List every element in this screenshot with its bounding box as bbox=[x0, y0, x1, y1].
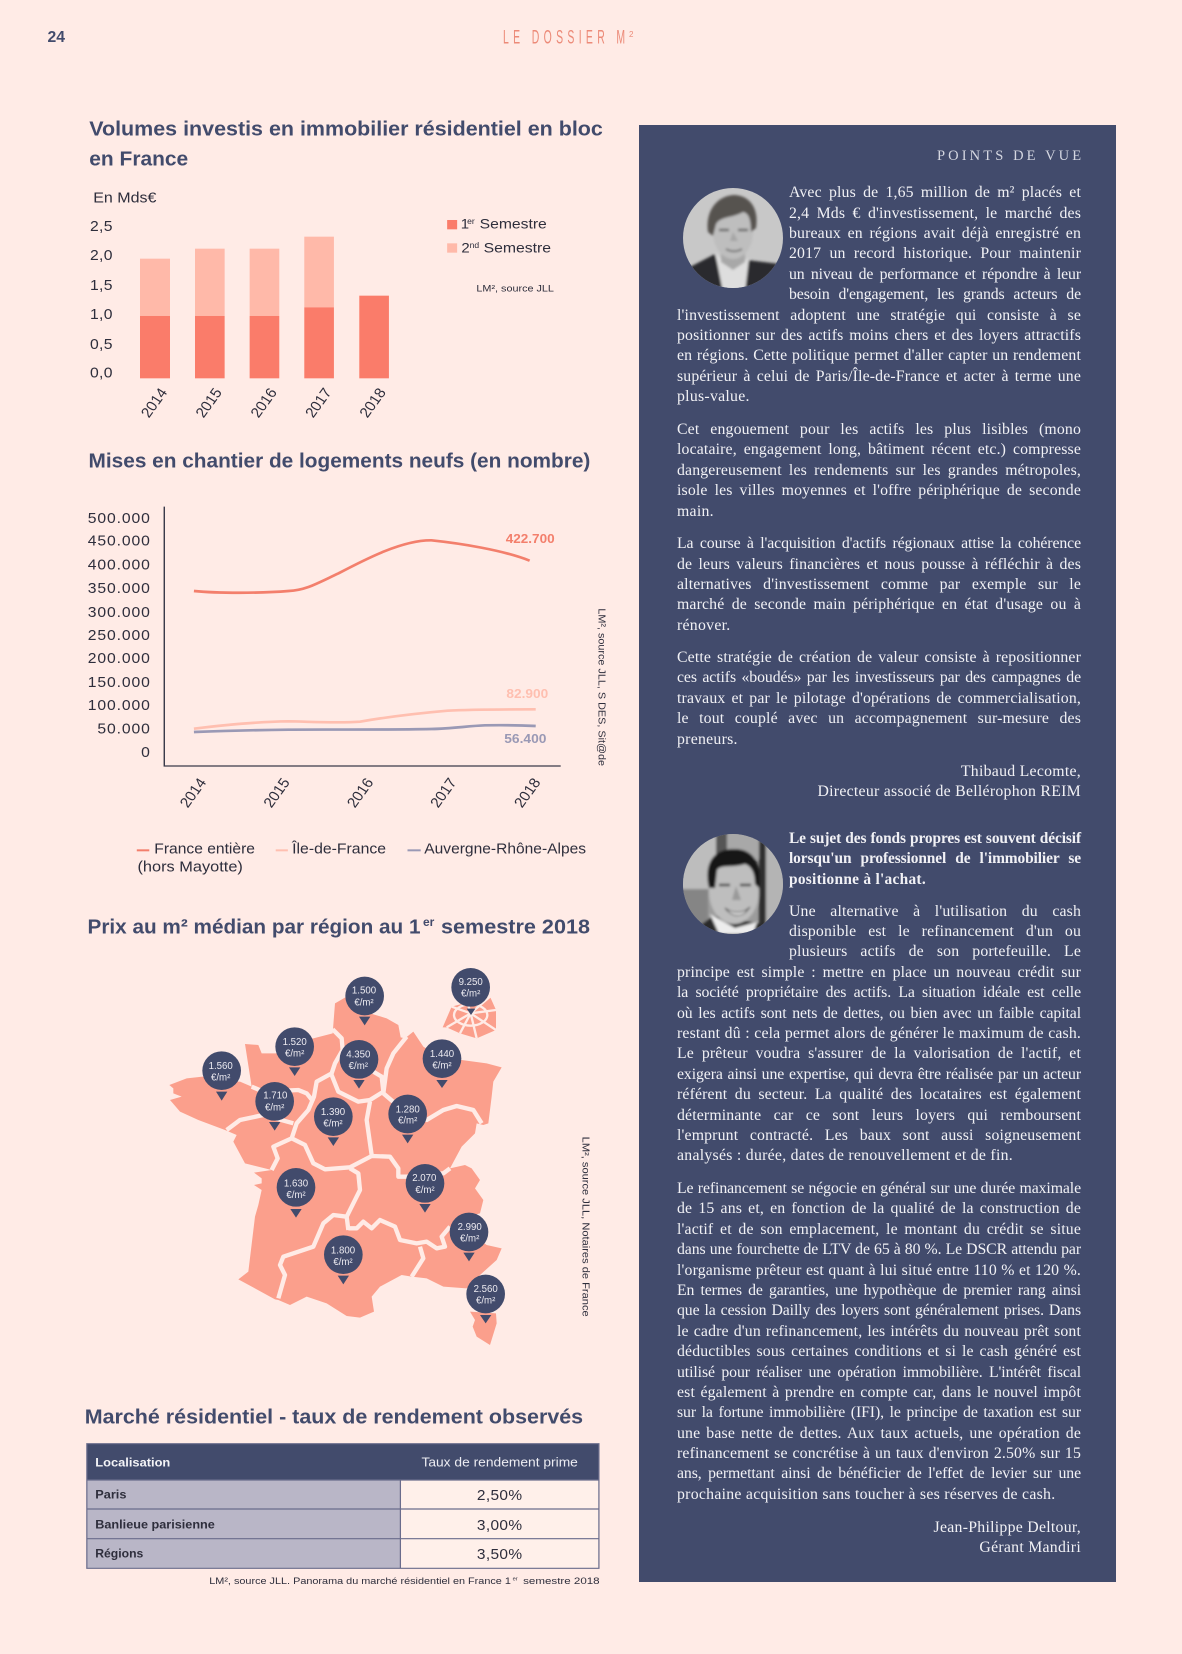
France silhouette bbox=[169, 993, 502, 1318]
x axis years bbox=[139, 386, 390, 421]
pin: Normandie bbox=[275, 1027, 314, 1076]
pin: Île-de-France: 4.350 bbox=[346, 1050, 370, 1061]
paragraph: conditions de crédit: est également à prendre en compte car, dans le nouvel impôt bbox=[677, 1384, 1081, 1401]
source note: LM², source JLL. Panorama du marché résidentiel en France 1 bbox=[209, 1576, 511, 1586]
source note: LM², source JLL, S DES, Sit@de bbox=[595, 608, 607, 766]
y axis labels: 500.000 bbox=[88, 510, 151, 527]
pin: Auvergne-Rhône-Alpes bbox=[406, 1164, 444, 1213]
legend: er bbox=[467, 216, 475, 226]
pin: Corse: 2.560 bbox=[474, 1284, 498, 1295]
pin: Corse bbox=[466, 1275, 505, 1323]
y axis labels: 0,5 bbox=[90, 336, 113, 353]
line: Île-de-France bbox=[194, 709, 536, 729]
table row: Régions: Régions bbox=[95, 1547, 143, 1561]
running header: LE DOSSIER M bbox=[503, 27, 625, 48]
paragraph: conditions de crédit: de 15 ans et, en fonction de la qualité de la construction de bbox=[677, 1200, 1081, 1217]
legend bbox=[137, 841, 586, 876]
y axis labels: 150.000 bbox=[88, 674, 151, 691]
legend: Île-de-France bbox=[291, 841, 386, 858]
paragraph: refinancement du portefeuille: plusieurs actifs de son portefeuille. Le bbox=[789, 943, 1081, 960]
value labels: 82.900 bbox=[506, 686, 548, 701]
signature: Thibaud Lecomte: Thibaud Lecomte, bbox=[961, 763, 1081, 780]
paragraph: opening with portrait: Avec plus de 1,65 million de m² placés et bbox=[789, 184, 1081, 201]
x axis years: 2014 bbox=[177, 776, 210, 811]
paragraph: stratégie bbox=[677, 649, 1081, 748]
x axis years: 2018 bbox=[357, 386, 390, 421]
pin: Paris bbox=[451, 968, 490, 1015]
paragraph: refinancement du portefeuille: exigera ainsi une expertise, qui devra être réalisée par un acteur bbox=[677, 1066, 1081, 1083]
paragraph: refinancement du portefeuille: disponible est le refinancement d'un ou bbox=[789, 923, 1081, 940]
pin: Hauts-de-France: €/m² bbox=[354, 997, 374, 1008]
pin: Corse: €/m² bbox=[476, 1295, 496, 1306]
paragraph: conditions de crédit: refinancement se concrétise à un taux d'environ 2.50% sur 15 bbox=[677, 1445, 1081, 1462]
paragraph: refinancement du portefeuille: restant dû : cela permet alors de générer le maximum de cash. bbox=[677, 1025, 1081, 1042]
y axis labels: 0 bbox=[141, 744, 151, 761]
heading: prix au m2: Prix au m² médian par région au 1 bbox=[88, 916, 420, 938]
x axis years: 2017 bbox=[303, 386, 336, 421]
regional borders bbox=[227, 1029, 482, 1298]
pin: Bourgogne-Franche-Comté: 1.280 bbox=[396, 1104, 420, 1115]
paragraph: refinancement du portefeuille: analysés : durée, dates de renouvellement et de fin. bbox=[677, 1147, 1013, 1164]
signature: Thibaud Lecomte: Directeur associé de Bellérophon REIM bbox=[817, 783, 1081, 800]
signature: Jean-Philippe Deltour: Jean-Philippe Deltour, bbox=[934, 1519, 1081, 1536]
pin: Grand Est bbox=[423, 1039, 461, 1088]
heading: marché résidentiel: Marché résidentiel - taux de rendement observés bbox=[85, 1406, 583, 1429]
heading: volumes investis: Volumes investis en immobilier résidentiel en bloc bbox=[89, 118, 603, 140]
x axis years bbox=[177, 776, 545, 811]
paragraph: conditions de crédit: sur la fortune immobilière (IFI), le principe de taxation est sur bbox=[677, 1404, 1081, 1421]
paragraph: stratégie: travaux et par le pilotage d'opérations de commercialisation, bbox=[677, 690, 1081, 707]
signature: Jean-Philippe Deltour: Gérant Mandiri bbox=[979, 1539, 1081, 1556]
x axis years: 2015 bbox=[261, 776, 294, 811]
pin: Bretagne: €/m² bbox=[211, 1073, 231, 1084]
x axis years: 2014 bbox=[139, 386, 171, 421]
legend: France entière bbox=[154, 842, 255, 858]
paragraph: refinancement du portefeuille: principe est simple : mettre en place un nouveau crédit sur bbox=[677, 964, 1081, 981]
pin: Occitanie: 1.800 bbox=[331, 1246, 355, 1257]
y axis labels bbox=[90, 218, 113, 382]
paragraph: intro bold: positionne à l'achat. bbox=[789, 871, 926, 888]
legend: 2 bbox=[461, 241, 470, 257]
y axis labels: 100.000 bbox=[88, 697, 151, 714]
pin: Centre-Val de Loire bbox=[314, 1097, 353, 1146]
pin: Centre-Val de Loire: €/m² bbox=[323, 1119, 343, 1130]
pin: Occitanie bbox=[324, 1235, 363, 1284]
line: France entière bbox=[194, 540, 530, 593]
panel heading: POINTS DE VUE bbox=[937, 148, 1084, 164]
paragraph: conditions de crédit: déductibles sous certaines conditions et si le cash généré est bbox=[677, 1343, 1081, 1360]
table: 3,00% bbox=[477, 1517, 522, 1534]
heading: prix au m2: er bbox=[423, 915, 435, 929]
paragraph: opening with portrait: en régions. Cette politique permet d'aller capter un rendement bbox=[677, 347, 1081, 364]
bar chart section: volumes investis bbox=[89, 118, 603, 421]
heading: volumes investis: en France bbox=[89, 148, 188, 170]
y axis labels: 350.000 bbox=[88, 580, 151, 597]
paragraph: conditions de crédit: une base nette de dettes. Aux taux actuels, une opération de bbox=[677, 1425, 1081, 1442]
paragraph: conditions de crédit: dans une fourchette de LTV de 65 à 80 %. Le DSCR attendu par bbox=[677, 1241, 1081, 1258]
y axis labels: 2,0 bbox=[90, 247, 113, 264]
pin: Hauts-de-France bbox=[345, 977, 384, 1025]
source note bbox=[209, 1576, 600, 1586]
value labels: 56.400 bbox=[504, 731, 546, 746]
paragraph: engouement: isole les villes moyennes et l'offre périphérique de seconde bbox=[677, 482, 1081, 499]
unit label: En Mds€ bbox=[93, 191, 157, 206]
y axis labels: 450.000 bbox=[88, 533, 151, 550]
paragraph: refinancement du portefeuille: la société propriétaire des actifs. La situation idéale est celle bbox=[677, 984, 1081, 1001]
x axis years: 2018 bbox=[512, 776, 545, 811]
pin: Bourgogne-Franche-Comté: €/m² bbox=[398, 1116, 418, 1127]
pin: Nouvelle-Aquitaine: 1.630 bbox=[284, 1178, 308, 1189]
portrait: Thibaud Lecomte bbox=[683, 188, 783, 288]
paragraph: conditions de crédit: prochaine acquisition sans toucher à ses réserves de cash. bbox=[677, 1486, 1055, 1503]
legend: Semestre bbox=[484, 241, 551, 257]
pin: Bretagne: 1.560 bbox=[209, 1061, 233, 1072]
paragraph: refinancement du portefeuille bbox=[677, 903, 1081, 1164]
paragraph: engouement: Cet engouement pour les actifs les plus lisibles (mono bbox=[677, 421, 1081, 438]
table row: Banlieue parisienne: Banlieue parisienne bbox=[95, 1518, 215, 1532]
pin: Hauts-de-France: 1.500 bbox=[352, 986, 376, 997]
legend: (hors Mayotte) bbox=[137, 860, 243, 876]
legend: nd bbox=[470, 240, 480, 250]
signature: Thibaud Lecomte bbox=[817, 763, 1081, 800]
paragraph: engouement bbox=[677, 421, 1081, 520]
paragraph: conditions de crédit: le cadre d'un refinancement, les intérêts du nouveau prêt sont bbox=[677, 1323, 1081, 1340]
paragraph: refinancement du portefeuille: Le prêteur voudra s'assurer de la valorisation de l'actif, et bbox=[677, 1045, 1081, 1062]
paragraph: conditions de crédit: l'organisme prêteur est quant à lui situé entre 110 % et 120 %. bbox=[677, 1262, 1081, 1279]
x axis years: 2017 bbox=[428, 776, 461, 811]
paragraph: stratégie: Cette stratégie de création de valeur consiste à repositionner bbox=[677, 649, 1081, 666]
paragraph: refinancement du portefeuille: déterminante car ce sont leurs loyers qui remboursent bbox=[677, 1107, 1081, 1124]
y axis labels: 300.000 bbox=[88, 604, 151, 621]
pin: Normandie: €/m² bbox=[285, 1048, 305, 1059]
Corsica bbox=[470, 1312, 497, 1345]
paragraph: opening with portrait: supérieur à celui de Paris/Île-de-France et acter à terme une bbox=[677, 368, 1081, 385]
table: 3,50% bbox=[477, 1546, 522, 1563]
running header: 2 bbox=[629, 30, 634, 39]
pin: Provence-Alpes-Côte d'Azur bbox=[450, 1213, 488, 1261]
paragraph: conditions de crédit: ans, permettant ainsi de bénéficier de l'effet de levier sur une bbox=[677, 1465, 1081, 1482]
paragraph: engouement: locataire, engagement long, bâtiment récent etc.) compresse bbox=[677, 441, 1081, 458]
source note: semestre 2018 bbox=[523, 1576, 600, 1586]
y axis labels: 400.000 bbox=[88, 557, 151, 574]
y axis labels: 0,0 bbox=[90, 365, 113, 382]
value labels: 422.700 bbox=[506, 531, 555, 546]
paragraph: course bbox=[677, 535, 1081, 634]
legend bbox=[447, 216, 551, 257]
pin: Nouvelle-Aquitaine: €/m² bbox=[286, 1190, 306, 1201]
paragraph: opening with portrait: l'investissement adoptent une stratégie qui consiste à se bbox=[677, 307, 1081, 324]
page number: 24 bbox=[48, 29, 65, 46]
paragraph: conditions de crédit: l'actif et de son emplacement, le montant du crédit se situe bbox=[677, 1221, 1081, 1238]
pin: Auvergne-Rhône-Alpes: 2.070 bbox=[412, 1173, 436, 1184]
portrait: Jean-Philippe Deltour bbox=[683, 834, 783, 934]
paragraph: refinancement du portefeuille: référent du secteur. La qualité des locataires est également bbox=[677, 1086, 1081, 1103]
table header: Localisation bbox=[95, 1456, 170, 1470]
pin: Grand Est: 1.440 bbox=[430, 1049, 454, 1060]
paragraph: refinancement du portefeuille: l'emprunt contracté. Les baux sont aussi soigneusement bbox=[677, 1127, 1081, 1144]
source note: er bbox=[513, 1577, 518, 1583]
pin: Île-de-France: €/m² bbox=[349, 1061, 369, 1072]
table: 2,50% bbox=[477, 1487, 522, 1504]
section: taux de rendement table bbox=[85, 1406, 600, 1586]
pin: Pays de la Loire bbox=[255, 1082, 294, 1131]
paragraph: opening with portrait bbox=[677, 184, 1081, 405]
heading: mises en chantier: Mises en chantier de logements neufs (en nombre) bbox=[89, 450, 590, 472]
pin: Nouvelle-Aquitaine bbox=[277, 1168, 315, 1218]
pin: Normandie: 1.520 bbox=[283, 1037, 307, 1048]
paragraph: opening with portrait: plus-value. bbox=[677, 388, 750, 405]
y axis labels bbox=[88, 510, 151, 761]
pin: Île-de-France bbox=[340, 1040, 378, 1089]
paragraph: course: de leurs valeurs financières et nous pousse à réfléchir à des bbox=[677, 556, 1081, 573]
y axis labels: 2,5 bbox=[90, 218, 113, 235]
axes bbox=[164, 507, 561, 766]
paragraph: refinancement du portefeuille: Une alternative à l'utilisation du cash bbox=[789, 903, 1081, 920]
table row: Paris: Paris bbox=[95, 1488, 126, 1502]
paragraph: course: rénover. bbox=[677, 617, 730, 634]
table bbox=[87, 1444, 599, 1568]
y axis labels: 250.000 bbox=[88, 627, 151, 644]
paragraph: refinancement du portefeuille: où les actifs sont nets de dettes, ou bien avec un faible capital bbox=[677, 1005, 1081, 1022]
paragraph: stratégie: ces actifs «boudés» par les investisseurs par des campagnes de bbox=[677, 669, 1081, 686]
y axis labels: 1,5 bbox=[90, 277, 113, 294]
y axis labels: 50.000 bbox=[97, 721, 151, 738]
paragraph: conditions de crédit: Le refinancement se négocie en général sur une durée maximale bbox=[677, 1180, 1081, 1197]
source note: LM², source JLL bbox=[476, 284, 554, 294]
paragraph: intro bold bbox=[789, 830, 1082, 888]
paragraph: opening with portrait: positionner sur des actifs moins chers et des loyers attractifs bbox=[677, 327, 1081, 344]
legend: Auvergne-Rhône-Alpes bbox=[424, 842, 586, 858]
paragraph: stratégie: le tout couplé avec un accompagnement sur-mesure des bbox=[677, 710, 1081, 727]
pin: Pays de la Loire: €/m² bbox=[265, 1102, 285, 1113]
panel: points de vue bbox=[639, 125, 1116, 1582]
table: Taux de rendement prime bbox=[421, 1455, 578, 1470]
source note: LM², source JLL, Notaires de France bbox=[580, 1137, 591, 1317]
pin: Pays de la Loire: 1.710 bbox=[263, 1091, 287, 1102]
paragraph: conditions de crédit: En termes de garanties, une hypothèque de premier rang ainsi bbox=[677, 1282, 1081, 1299]
pin: Auvergne-Rhône-Alpes: €/m² bbox=[415, 1185, 435, 1196]
heading: volumes investis bbox=[89, 118, 603, 170]
stacked bars bbox=[140, 237, 389, 378]
y axis labels: 1,0 bbox=[90, 306, 113, 323]
paragraph: course: alternatives d'investissement comme par exemple sur le bbox=[677, 576, 1081, 593]
paragraph: engouement: dangereusement les rendements sur les grandes métropoles, bbox=[677, 462, 1081, 479]
pin: Paris: 9.250 bbox=[459, 977, 483, 988]
heading: prix au m2: semestre 2018 bbox=[441, 916, 590, 938]
x axis years: 2016 bbox=[345, 776, 377, 811]
pin: Provence-Alpes-Côte d'Azur: €/m² bbox=[460, 1233, 480, 1244]
pin: Bourgogne-Franche-Comté bbox=[388, 1095, 427, 1143]
signature: Jean-Philippe Deltour bbox=[934, 1519, 1081, 1556]
paragraph: course: marché de seconde main périphérique en état d'usage ou à bbox=[677, 596, 1081, 613]
value labels bbox=[504, 531, 555, 746]
paragraph: opening with portrait: 2017 un record historique. Pour maintenir bbox=[789, 245, 1081, 262]
heading: prix au m2 bbox=[88, 915, 590, 938]
paragraph: intro bold: lorsqu'un professionnel de l'immobilier se bbox=[789, 850, 1081, 867]
paragraph: opening with portrait: bureaux en régions avait déjà enregistré en bbox=[789, 225, 1081, 242]
pin: Centre-Val de Loire: 1.390 bbox=[321, 1107, 345, 1118]
paragraph: opening with portrait: besoin d'engagement, les grands acteurs de bbox=[789, 286, 1081, 303]
y axis labels: 200.000 bbox=[88, 650, 151, 667]
x axis years: 2015 bbox=[193, 386, 226, 421]
paragraph: stratégie: preneurs. bbox=[677, 731, 738, 748]
pin: Paris: €/m² bbox=[461, 989, 481, 1000]
paragraph: conditions de crédit bbox=[677, 1180, 1081, 1503]
paragraph: opening with portrait: 2,4 Mds € d'investissement, le marché des bbox=[789, 205, 1081, 222]
paragraph: intro bold: Le sujet des fonds propres est souvent décisif bbox=[789, 830, 1081, 847]
Paris arrondissements inset bbox=[443, 997, 496, 1038]
line: Auvergne-Rhône-Alpes bbox=[194, 725, 536, 732]
paragraph: conditions de crédit: que la cession Dailly des loyers sont généralement prises. Dans bbox=[677, 1302, 1081, 1319]
x axis years: 2016 bbox=[248, 386, 281, 421]
map of France with regional prices bbox=[169, 968, 591, 1345]
pin: Bretagne bbox=[202, 1051, 241, 1101]
paragraph: course: La course à l'acquisition d'actifs régionaux attise la cohérence bbox=[677, 535, 1081, 552]
paragraph: conditions de crédit: utilisé pour réaliser une opération immobilière. L'intérêt fiscal bbox=[677, 1364, 1081, 1381]
pin: Occitanie: €/m² bbox=[333, 1257, 353, 1268]
paragraph: engouement: main. bbox=[677, 503, 714, 520]
pin: Grand Est: €/m² bbox=[432, 1061, 452, 1072]
legend: 1 bbox=[461, 217, 469, 233]
line chart section: mises en chantier bbox=[88, 450, 607, 876]
paragraph: opening with portrait: un niveau de performance et répondre à leur bbox=[789, 266, 1081, 283]
legend: Semestre bbox=[480, 217, 547, 233]
pin: Provence-Alpes-Côte d'Azur: 2.990 bbox=[458, 1222, 482, 1233]
